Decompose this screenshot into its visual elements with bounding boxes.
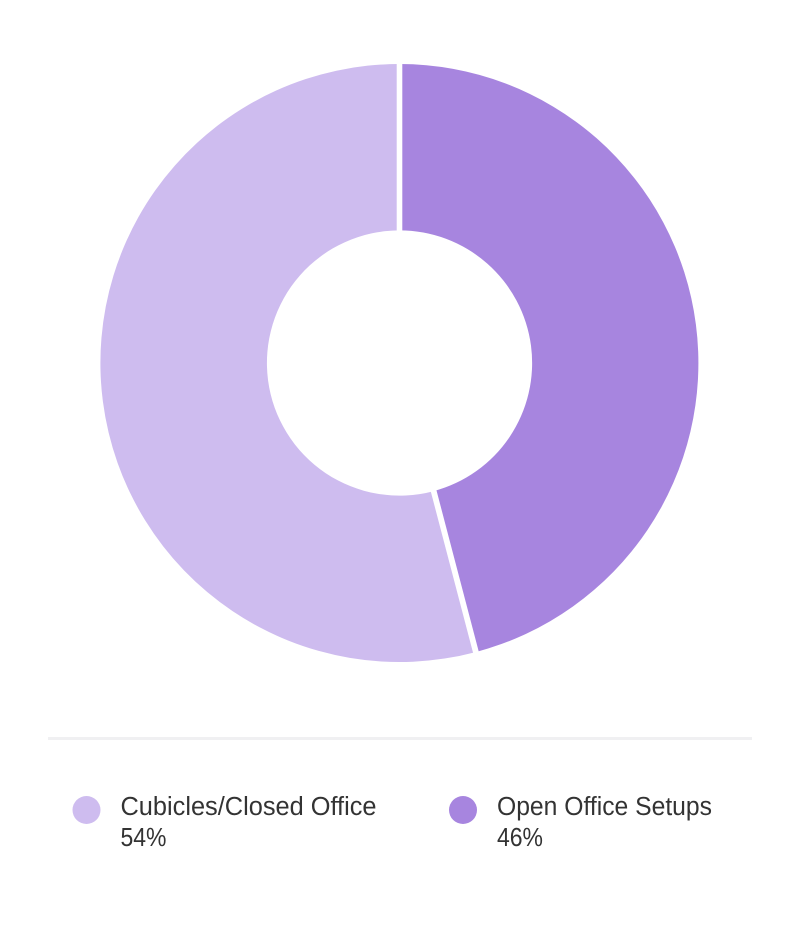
- segment gap: bottom: [433, 487, 477, 656]
- legend swatch: light purple: [72, 796, 100, 824]
- legend value: 46%: 46%: [497, 824, 543, 852]
- legend label: Open Office Setups: Open Office Setups: [497, 793, 712, 821]
- legend swatch: dark purple: [449, 796, 477, 824]
- legend value: 54%: 54%: [120, 824, 166, 852]
- segment: Cubicles/Closed Office 54%: [100, 64, 476, 662]
- legend: [72, 793, 712, 852]
- legend label: Cubicles/Closed Office: Cubicles/Closed Office: [120, 793, 376, 821]
- legend item: Open Office Setups: [449, 793, 712, 852]
- donut chart: [100, 60, 698, 662]
- legend item: Cubicles/Closed Office: [72, 793, 376, 852]
- segment gap: top: [397, 60, 402, 234]
- segment: Open Office Setups 46%: [400, 64, 698, 652]
